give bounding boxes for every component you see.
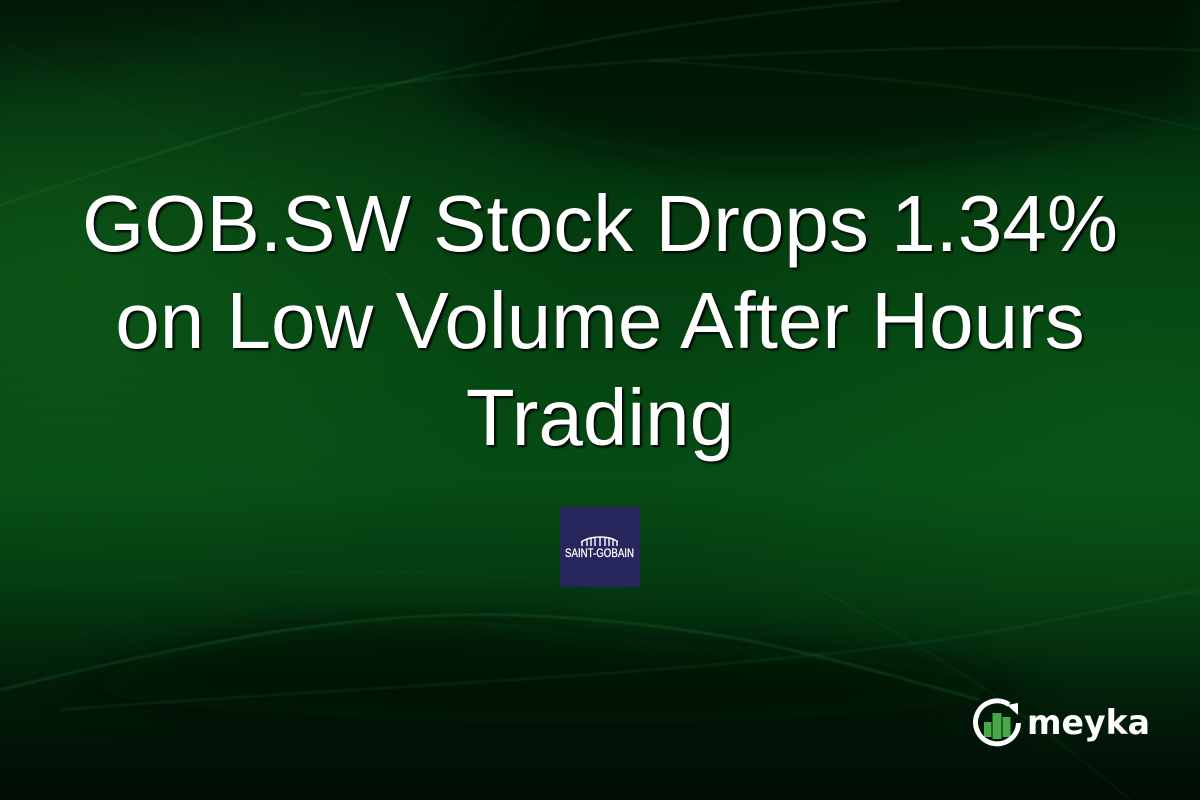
title: Trading — [466, 373, 734, 462]
title: GOB.SW Stock Drops 1.34% — [82, 179, 1118, 268]
title: on Low Volume After Hours — [115, 276, 1085, 365]
title — [82, 179, 1118, 465]
logo: meyka — [973, 698, 1150, 746]
icon: bridge arches — [581, 537, 618, 546]
logo: Saint-Gobain — [560, 507, 640, 587]
icon: circular arrow with green bars — [976, 701, 1018, 744]
wordmark: meyka — [1027, 703, 1150, 743]
